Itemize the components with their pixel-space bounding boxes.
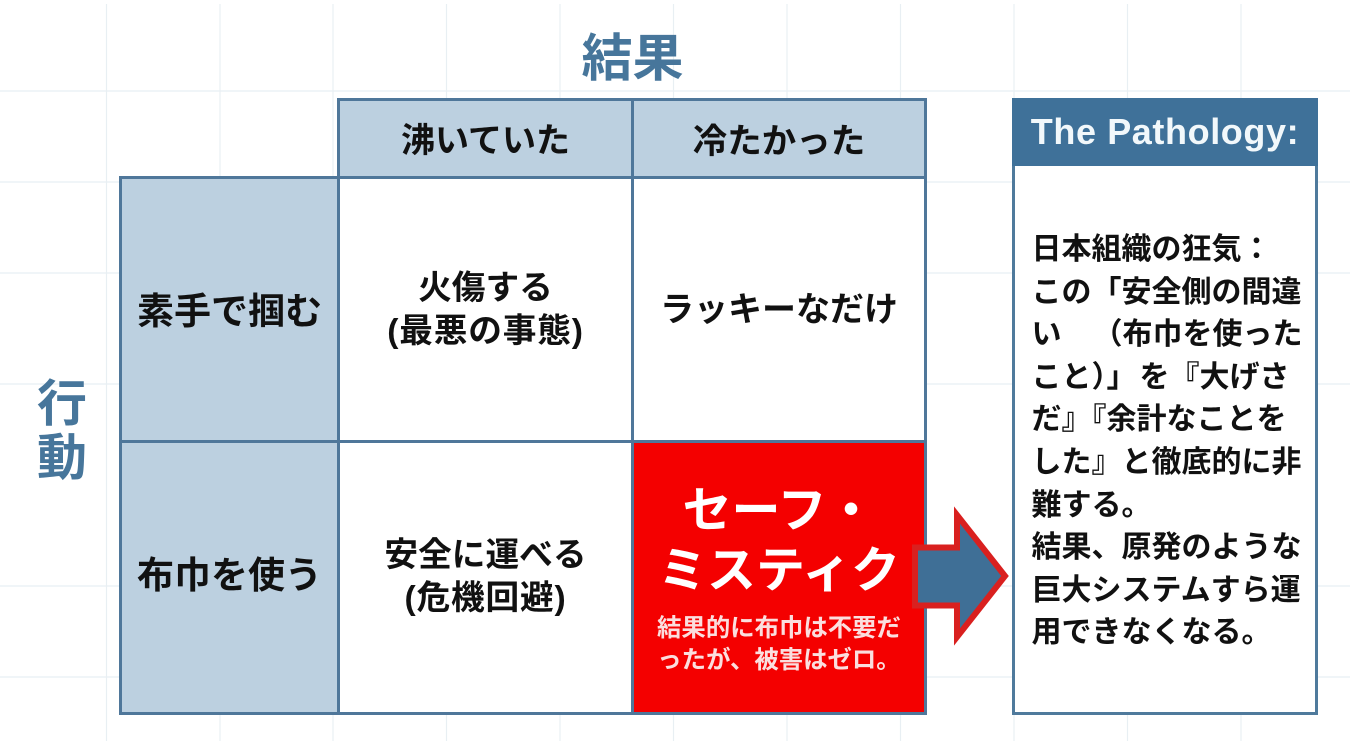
cell: 火傷する: 火傷する xyxy=(418,269,553,307)
panel body text: 用できなくなる。 xyxy=(1032,616,1272,649)
cell: ラッキーなだけ xyxy=(631,176,927,443)
cell: 火傷する: (最悪の事態) xyxy=(387,312,584,350)
row header: 布巾を使う xyxy=(119,440,340,715)
highlight note: ったが、被害はゼロ。 xyxy=(657,647,901,674)
cell: 火傷する xyxy=(337,176,634,443)
panel header xyxy=(1012,98,1318,166)
panel body text: い （布巾を使った xyxy=(1032,318,1302,351)
column header: 冷たかった: 冷たかった xyxy=(693,122,865,160)
cell: 安全に運べる: 安全に運べる xyxy=(384,536,587,574)
heading: 行動: 行 xyxy=(37,376,87,432)
heading: 行動: 動 xyxy=(37,430,87,486)
panel body text: こと）」を『大げさ xyxy=(1032,361,1290,394)
row header: 素手で掴む xyxy=(119,176,340,443)
panel: The Pathology xyxy=(1012,98,1318,715)
panel body text: 結果、原発のような xyxy=(1032,531,1302,564)
row header: 素手で掴む: 素手で掴む xyxy=(137,290,322,332)
arrow: from highlight to pathology panel xyxy=(912,506,1009,646)
heading: 行動 xyxy=(37,376,87,486)
highlight title: セーフ・ xyxy=(682,484,876,538)
highlight title: ミスティク xyxy=(658,544,900,598)
panel: decision matrix xyxy=(119,98,927,715)
cell: セーフ・ミスティク highlight xyxy=(631,440,927,715)
panel body text: した』と徹底的に非 xyxy=(1032,446,1302,479)
highlight title xyxy=(658,484,900,598)
column header: 沸いていた: 沸いていた xyxy=(401,122,570,160)
cell: 安全に運べる: (危機回避) xyxy=(404,578,566,616)
column header: 冷たかった xyxy=(631,98,927,179)
panel body text: だ』『余計なことを xyxy=(1032,403,1286,436)
panel header: The Pathology: xyxy=(1031,111,1299,152)
row header: 布巾を使う: 布巾を使う xyxy=(137,554,322,596)
panel body text: 日本組織の狂気： xyxy=(1032,233,1272,266)
highlight note xyxy=(657,615,901,674)
panel body text xyxy=(1032,233,1302,649)
panel body text: 巨大システムすら運 xyxy=(1032,574,1301,607)
panel body text: 難する。 xyxy=(1032,489,1152,522)
cell: ラッキーなだけ: ラッキーなだけ xyxy=(660,291,898,329)
column header: 沸いていた xyxy=(337,98,634,179)
panel body text: この「安全側の間違 xyxy=(1032,276,1302,309)
cell: 安全に運べる xyxy=(337,440,634,715)
heading: 結果: 結果 xyxy=(581,30,684,87)
highlight note: 結果的に布巾は不要だ xyxy=(657,615,901,642)
